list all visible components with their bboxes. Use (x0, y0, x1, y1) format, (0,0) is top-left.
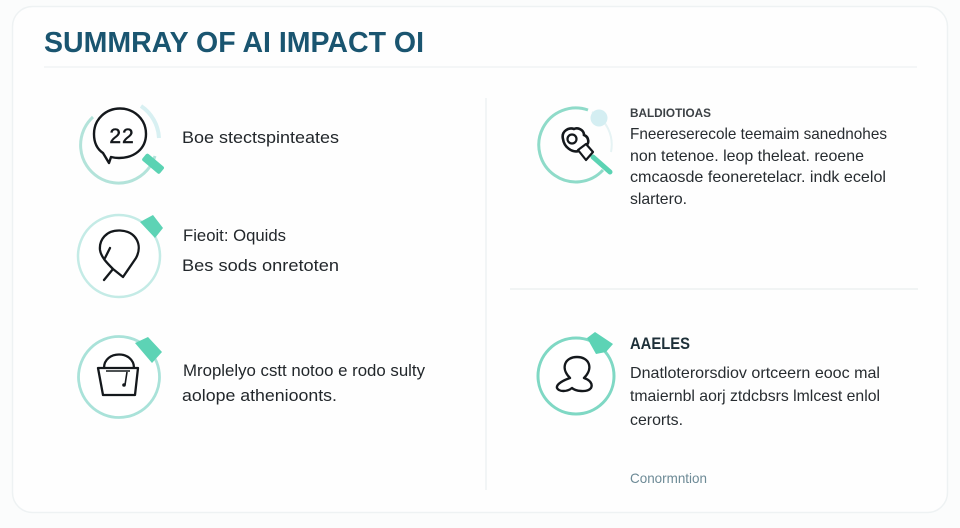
icon: head profile (78, 215, 163, 297)
text block: Fneereserecole teemaim sanednohes (630, 126, 887, 143)
title: SUMMRAY OF AI IMPACT OI (44, 27, 424, 59)
text: Bes sods onretoten (182, 257, 339, 275)
icon: gear with magnifier (539, 108, 612, 182)
icon: speech bubble with magnifier: 22 (109, 125, 135, 148)
text block: tmaiernbl aorj ztdcbsrs lmlcest enlol (630, 388, 880, 405)
subheading: BALDIOTIOAS (630, 106, 711, 120)
text block: slartero. (630, 191, 687, 208)
text block: non tetenoe. leop theleat. reoene (630, 148, 864, 165)
icon: person (538, 332, 614, 414)
text block: cmcaosde feoneretelacr. indk ecelol (630, 169, 886, 186)
text block (630, 126, 887, 208)
subheading: AAELES (630, 334, 690, 353)
text (182, 227, 339, 275)
text: Fieoit: Oquids (183, 227, 286, 245)
item: head (78, 215, 339, 297)
item: bottom right (538, 332, 880, 486)
item: top right (539, 106, 887, 208)
text block: Dnatloterorsdiov ortceern eooc mal (630, 365, 880, 382)
text: aolope athenioonts. (182, 387, 337, 405)
item: speech bubble (81, 106, 339, 183)
text (182, 362, 426, 405)
text: Boe stectspinteates (182, 129, 339, 147)
icon: speech bubble with magnifier (81, 106, 165, 183)
text block (630, 365, 880, 429)
text block: cerorts. (630, 412, 683, 429)
footer label: Conormntion (630, 470, 707, 486)
text: Mroplelyo cstt notoo e rodo sulty (183, 362, 426, 380)
item: bag (78, 336, 426, 418)
icon: bag (78, 336, 162, 418)
